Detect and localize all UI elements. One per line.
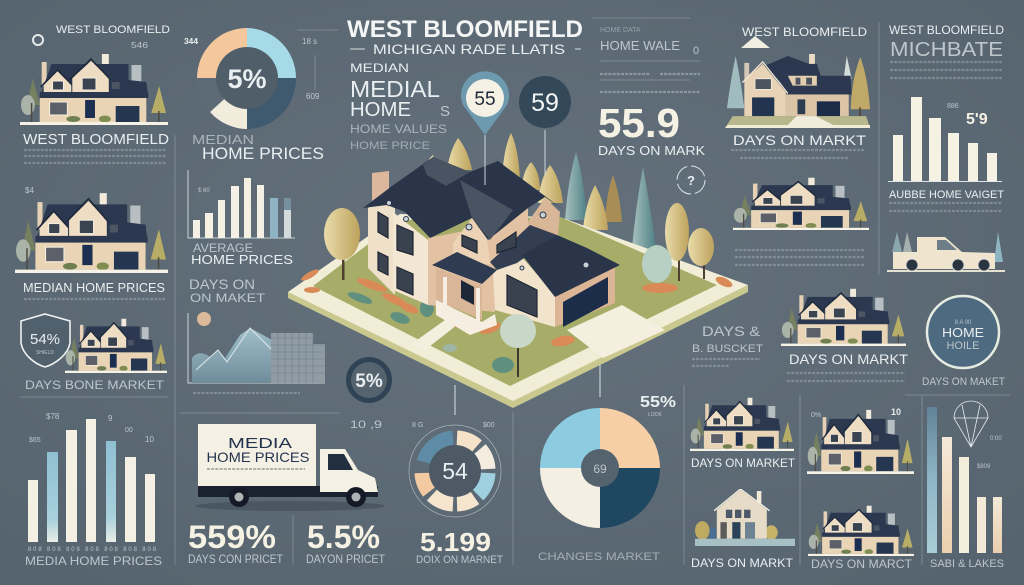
stat: 55% days on price bbox=[188, 519, 283, 566]
label: MEDIAN HOME PRICES bbox=[23, 280, 165, 295]
chimney bbox=[372, 171, 389, 205]
label: days on market: ON MAKET bbox=[190, 291, 266, 305]
label: changes market: CHANGES MARKET bbox=[538, 551, 660, 563]
heading: median home prices bbox=[192, 132, 324, 163]
windows bbox=[378, 212, 537, 317]
shrubs bbox=[346, 290, 514, 373]
caption lines bbox=[890, 62, 1002, 78]
panel: house row 2 right bbox=[807, 407, 914, 474]
heading: median home prices: MEDIAN bbox=[192, 132, 254, 147]
map pin: 59 bbox=[519, 76, 571, 175]
bar chart: sabi and lakes: $809 bbox=[977, 464, 991, 470]
tree: left bbox=[324, 208, 360, 280]
bar chart: median home prices bbox=[25, 412, 162, 568]
caption lines bbox=[24, 150, 166, 163]
title: WEST BLOOMFIELD bbox=[347, 16, 583, 43]
stat: 55% bbox=[640, 394, 676, 418]
label: days on market: DAYS ON MAKET bbox=[922, 376, 1005, 388]
heading: median home bbox=[350, 61, 450, 152]
bar chart: average home prices: $ 60 bbox=[198, 188, 210, 194]
bar chart: median home prices: $65 bbox=[29, 437, 41, 444]
front tree bbox=[500, 314, 536, 377]
circle badge: home: 8 A 00 bbox=[955, 320, 972, 326]
segmented ring chart: 54: $00 bbox=[483, 422, 495, 429]
illustration: house bbox=[807, 410, 914, 474]
stat: 55%: 55% bbox=[640, 394, 676, 411]
bar chart: median home prices: $78 bbox=[46, 412, 60, 421]
area chart bbox=[188, 312, 325, 393]
bars bbox=[893, 97, 997, 181]
porch roof bbox=[432, 252, 497, 284]
stat panel: home value 55.9: DAYS ON MARK bbox=[598, 143, 705, 158]
lawn bbox=[313, 217, 717, 386]
label: DAYS BONE MARKET bbox=[25, 378, 165, 392]
pie chart bbox=[540, 365, 660, 528]
donut chart: median home prices: 18 s bbox=[302, 37, 317, 46]
illustration: house bbox=[808, 506, 914, 556]
heading: median home: HOME PRICE bbox=[350, 140, 430, 152]
stat panel: home value 55.9: 55.9 bbox=[598, 100, 680, 146]
house walls bbox=[368, 190, 615, 327]
driveway bbox=[567, 305, 665, 358]
circle badge: home bbox=[927, 296, 999, 368]
title bbox=[347, 16, 583, 57]
illustration: house bbox=[725, 54, 870, 128]
label: days on market bbox=[189, 276, 266, 305]
icon: roof bbox=[741, 36, 770, 48]
small number: $4 bbox=[25, 186, 34, 195]
panel: house row 3 right bbox=[808, 506, 914, 571]
donut chart: median home prices: 5% bbox=[227, 64, 267, 94]
back trees bbox=[423, 133, 656, 250]
panel: shield and house bbox=[21, 314, 167, 392]
heading: west bloomfield large: WEST BLOOMFIELD bbox=[23, 131, 169, 148]
icon: circular arrows: ? bbox=[687, 173, 695, 188]
bar chart: median home prices: 808 808 808 808 808 808 808 bbox=[28, 547, 157, 553]
panel: second house bbox=[15, 186, 168, 299]
bar chart: median home prices: 00 bbox=[125, 427, 133, 434]
bar chart: sabi and lakes: 0:00 bbox=[990, 436, 1002, 442]
caption lines bbox=[735, 250, 865, 265]
badge: 5% bbox=[346, 357, 392, 403]
bar chart: median home prices: 10 bbox=[145, 435, 154, 444]
icon: shield 54%: 54% bbox=[30, 331, 60, 348]
main roof bbox=[363, 157, 565, 240]
panel: west bloomfield top-left bbox=[20, 24, 170, 163]
heading: median home: HOME bbox=[350, 99, 411, 121]
stat: 55%: LOOK bbox=[648, 412, 663, 418]
stat: 5.5% days on price: 5.5% bbox=[307, 519, 380, 555]
bar chart: sabi and lakes bbox=[927, 401, 1004, 570]
label: DAYS ON MARKT bbox=[733, 132, 867, 148]
stat panel: home value 55.9: 0 bbox=[693, 45, 699, 57]
panel: michigan bar chart: 5'9 bbox=[966, 111, 988, 128]
heading: median home: MEDIAN bbox=[350, 61, 409, 75]
bar chart: sabi and lakes: SABI & LAKES bbox=[930, 558, 1004, 570]
stat: 55% days on price: DAYS CON PRICET bbox=[188, 554, 283, 566]
ground base bbox=[288, 285, 748, 408]
caption lines bbox=[731, 150, 865, 158]
porch bbox=[436, 300, 497, 335]
bar chart: median home prices: MEDIA HOME PRICES bbox=[25, 554, 162, 568]
text block: days and market bbox=[692, 323, 763, 366]
label: DAYS ON MARKT bbox=[691, 556, 794, 570]
pie chart: 69 bbox=[593, 462, 607, 476]
stat panel: home value 55.9 bbox=[598, 27, 705, 158]
stat: 5.5% days on price: DAYON PRICET bbox=[306, 554, 385, 566]
illustration: small house bbox=[733, 178, 869, 230]
panel: classic house bbox=[691, 489, 795, 570]
text block: days and market: DAYS & bbox=[702, 323, 761, 339]
icon: shield 54% bbox=[21, 314, 70, 367]
truck: media home prices: HOME PRICES bbox=[206, 449, 310, 465]
illustration: house bbox=[15, 193, 168, 273]
illustration: house bbox=[20, 54, 168, 125]
circle badge: home: HOILE bbox=[946, 340, 980, 352]
panel: michigan bar chart bbox=[888, 25, 1004, 211]
subheading: MICHBATE bbox=[890, 39, 1003, 61]
map pin: 53: 55 bbox=[474, 89, 496, 110]
illustration: house bbox=[690, 398, 794, 451]
central illustration: isometric house bbox=[288, 133, 748, 408]
lower roof bbox=[490, 225, 557, 270]
trees: right bbox=[642, 203, 714, 283]
garage roof bbox=[522, 235, 620, 297]
pickup truck bbox=[887, 232, 1005, 272]
label: days on market: DAYS ON bbox=[189, 276, 255, 292]
panel: west bloomfield top-right house bbox=[725, 25, 870, 158]
icon: shield 54%: SHIELD bbox=[36, 350, 54, 356]
stat: 5.199: DOIX ON MARNET bbox=[416, 554, 503, 566]
heading: WEST BLOOMFIELD bbox=[889, 25, 1004, 37]
text block: days and market: B. BUSCKET bbox=[692, 343, 763, 355]
bar values: 886 bbox=[947, 103, 959, 110]
label: average home prices: HOME PRICES bbox=[191, 252, 293, 267]
icon: small badge bbox=[33, 35, 43, 45]
segmented ring chart: 54 bbox=[409, 385, 501, 517]
label: DAYS ON MARCT bbox=[811, 557, 913, 571]
heading: west bloomfield small: WEST BLOOMFIELD bbox=[56, 24, 170, 36]
icon: balloon bbox=[954, 401, 988, 447]
illustration: house bbox=[65, 319, 167, 373]
donut chart: median home prices bbox=[184, 28, 338, 129]
panel: small house and caption bbox=[733, 178, 869, 265]
donut chart: median home prices: 609 bbox=[306, 92, 320, 101]
label: DAYS ON MARKET bbox=[691, 456, 796, 470]
title: MICHIGAN RADE LLATIS bbox=[373, 42, 565, 57]
panel: house row 2 left bbox=[690, 398, 796, 470]
bar chart: median home prices: 9 bbox=[108, 414, 113, 423]
map pin: 53 bbox=[461, 71, 509, 185]
caption lines bbox=[787, 373, 905, 381]
icon: circular arrows bbox=[677, 166, 705, 194]
heading: median home prices: HOME PRICES bbox=[202, 144, 324, 163]
heading: median home: HOME VALUES bbox=[350, 122, 447, 136]
label: average home prices: AVERAGE bbox=[193, 241, 253, 255]
heading: median home: MEDIAL bbox=[350, 76, 440, 102]
heading: median home: S bbox=[440, 103, 450, 120]
donut chart: median home prices: 344 bbox=[184, 37, 199, 46]
circle badge: home: HOME bbox=[942, 325, 984, 340]
small number: 546 bbox=[131, 41, 149, 50]
small number: 10 bbox=[891, 407, 901, 417]
segmented ring chart: 54: 54 bbox=[442, 458, 468, 484]
caption lines bbox=[889, 203, 1002, 211]
truck number: 10 ,9 bbox=[350, 419, 382, 431]
truck: media home prices bbox=[195, 424, 385, 511]
bar chart: average home prices bbox=[188, 170, 295, 238]
label: AUBBE HOME VAIGET bbox=[889, 189, 1004, 201]
map pin: 59: 59 bbox=[531, 89, 559, 117]
stat panel: home value 55.9: HOME DATA bbox=[600, 27, 641, 34]
stat panel: home value 55.9: HOME WALE bbox=[600, 38, 680, 53]
illustration: house bbox=[781, 289, 906, 346]
stat: 55% days on price: 559% bbox=[188, 519, 276, 555]
panel: house row 2 right: 0% bbox=[811, 412, 821, 419]
garage door bbox=[563, 277, 608, 327]
label: DAYS ON MARKT bbox=[789, 352, 908, 367]
heading: WEST BLOOMFIELD bbox=[742, 25, 867, 39]
truck: media home prices: MEDIA bbox=[228, 435, 292, 452]
panel: days on market house bbox=[781, 289, 908, 381]
label: average home prices bbox=[191, 241, 293, 267]
illustration: classic house bbox=[695, 489, 795, 546]
stat: 5.199: 5.199 bbox=[420, 527, 491, 557]
badge: 5%: 5% bbox=[355, 371, 383, 392]
stat: 5.199 bbox=[416, 527, 503, 566]
segmented ring chart: 54: 8 G bbox=[412, 422, 423, 429]
flower beds bbox=[300, 267, 734, 348]
round windows bbox=[386, 200, 589, 270]
